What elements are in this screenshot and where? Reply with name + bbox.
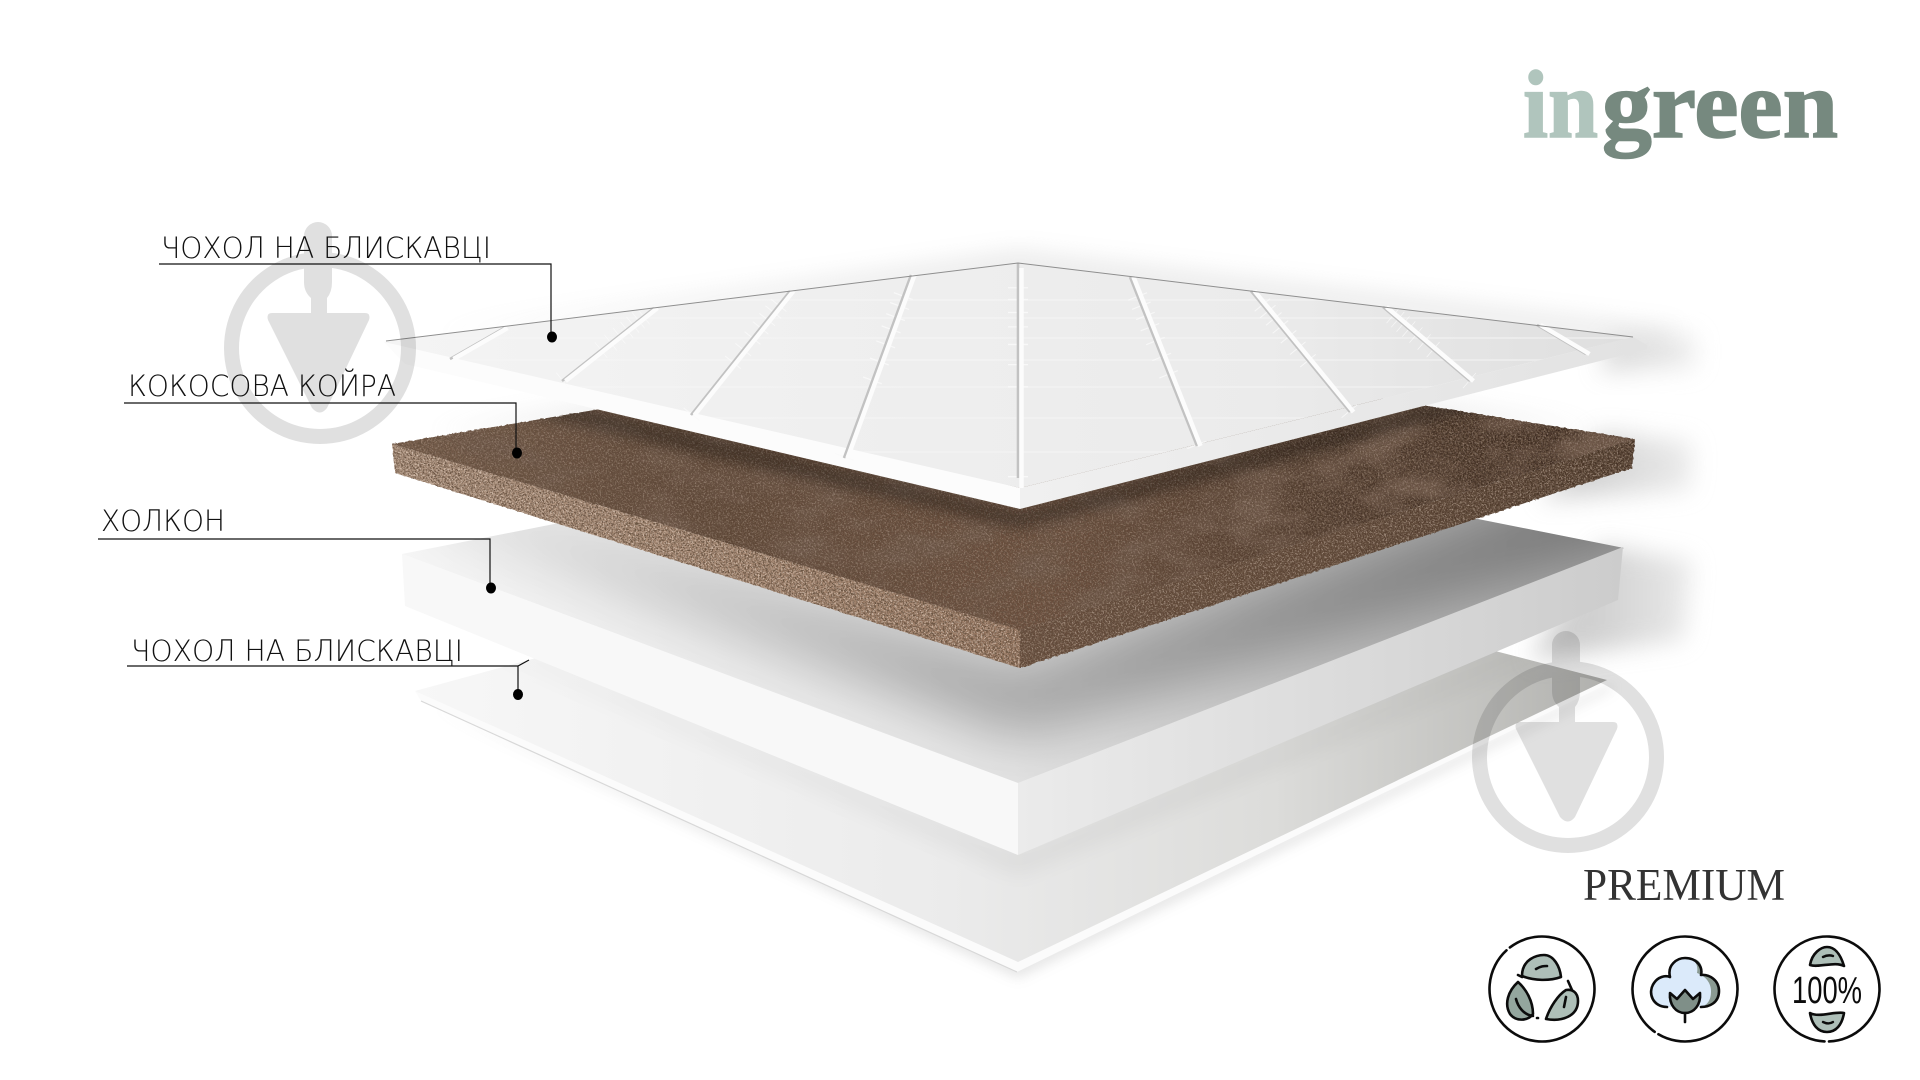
mattress layer: holkon block bbox=[403, 507, 1695, 855]
quilt seams: light groove bevels bbox=[454, 268, 1590, 488]
callout: holkon bbox=[98, 504, 496, 594]
mattress layer: bottom zip cover sheet bbox=[417, 652, 1607, 978]
icon: cotton boll bbox=[1612, 916, 1758, 1062]
callout: coconut coir bbox=[124, 369, 522, 458]
callout: zip cover bottom bbox=[127, 634, 529, 700]
icon: 100 percent natural: 100% bbox=[1792, 970, 1862, 1012]
logo: ingreen: green bbox=[1602, 51, 1838, 158]
quilt seams: groove ticks bbox=[562, 263, 1470, 478]
quilt seams: cross tile lines bbox=[1162, 337, 1630, 453]
mattress layer: coconut coir slab bbox=[380, 330, 1692, 675]
icon: 100 percent natural bbox=[1772, 934, 1882, 1044]
callout: zip cover top bbox=[159, 231, 557, 342]
quilt seams: shaded grooves bbox=[450, 263, 1586, 478]
logo: ingreen: in bbox=[1523, 51, 1598, 158]
heading: PREMIUM: PREMIUM bbox=[1583, 860, 1785, 910]
watermark: trowel in circle, right bbox=[1472, 631, 1664, 853]
callout: coconut coir: КОКОСОВА КОЙРА bbox=[128, 369, 396, 403]
icon: recycled leaves bbox=[1468, 915, 1616, 1063]
callout: zip cover bottom: ЧОХОЛ НА БЛИСКАВЦІ bbox=[131, 634, 463, 668]
quilt top surface bbox=[384, 263, 1633, 488]
callout: holkon: ХОЛКОН bbox=[101, 504, 225, 538]
quilt rim: front right bevel bbox=[1020, 337, 1647, 509]
watermark: trowel in circle, left bbox=[224, 222, 416, 444]
quilt rim: front left bevel bbox=[384, 342, 1020, 509]
callout: zip cover top: ЧОХОЛ НА БЛИСКАВЦІ bbox=[161, 231, 491, 265]
mattress layer: quilted top zip cover bbox=[380, 252, 1695, 509]
